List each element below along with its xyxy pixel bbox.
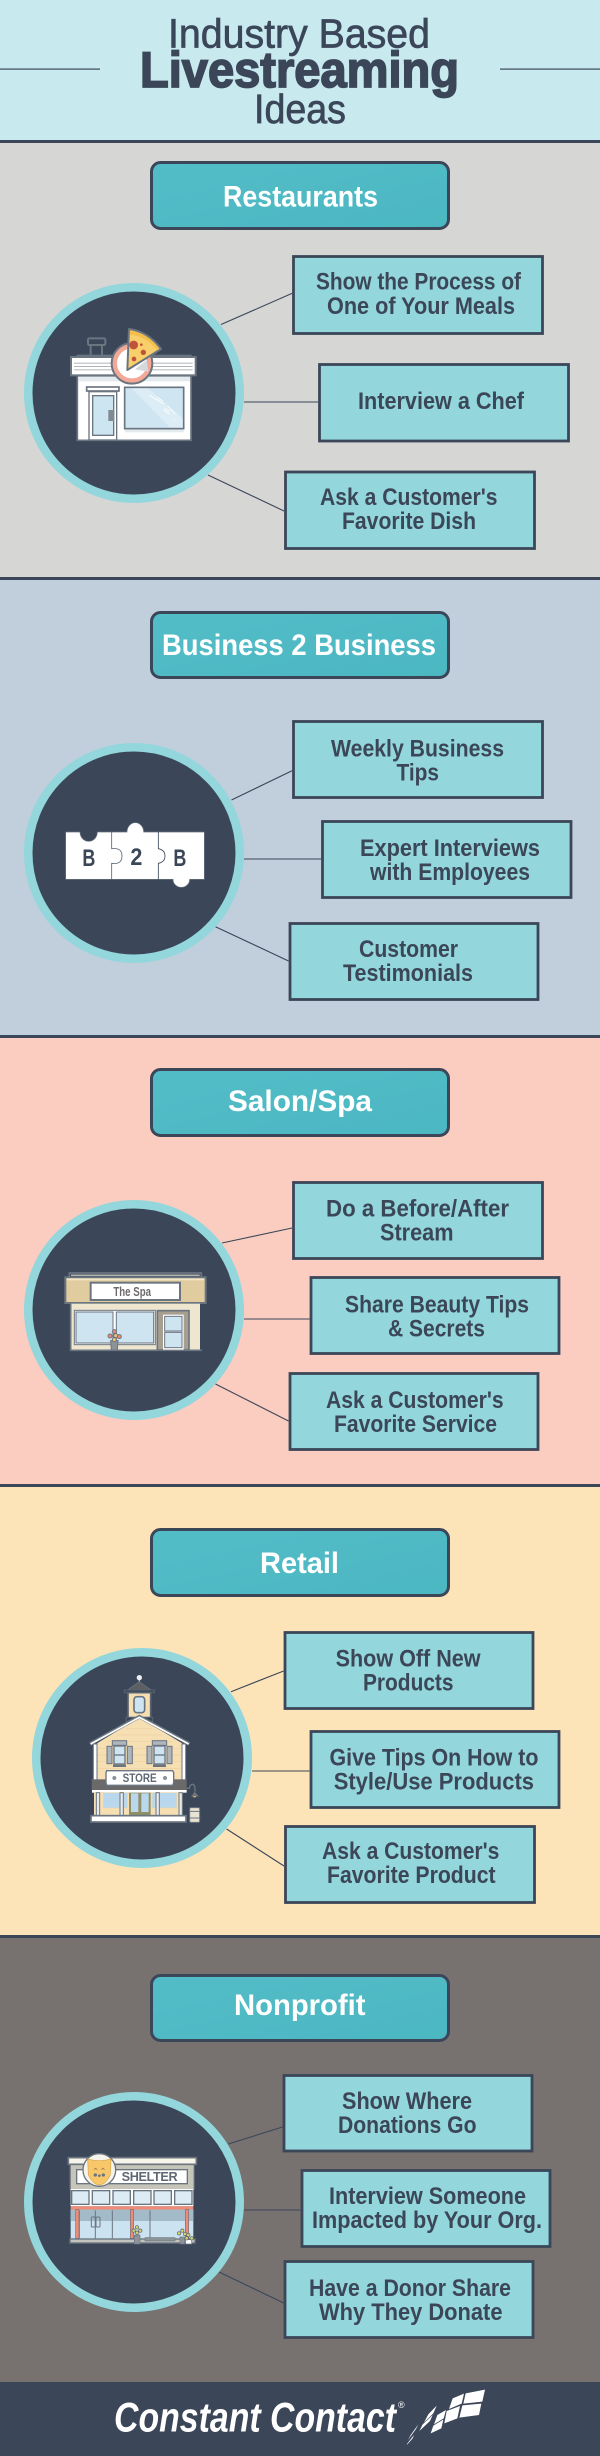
- connector lines: [216, 771, 321, 961]
- icon: restaurant in circle: [28, 287, 240, 499]
- idea box: weekly tips: Weekly Business: [331, 736, 504, 763]
- idea box: style tips: [311, 1732, 559, 1808]
- heading: retail: Retail: [260, 1547, 339, 1580]
- idea box: before after: [294, 1182, 542, 1258]
- idea box: favorite service: Favorite Service: [334, 1411, 497, 1438]
- idea box: expert interviews: Expert Interviews: [360, 835, 540, 862]
- idea box: favorite product: Favorite Product: [327, 1862, 496, 1889]
- idea box: beauty tips: & Secrets: [388, 1316, 485, 1343]
- idea box: interview someone: Interview Someone: [329, 2183, 526, 2210]
- idea box: new products: Products: [363, 1670, 454, 1697]
- idea box: expert interviews: with Employees: [369, 859, 530, 886]
- idea box: before after: Do a Before/After: [326, 1196, 509, 1223]
- heading: restaurants: Restaurants: [223, 180, 378, 214]
- icon: store building in circle: [36, 1652, 248, 1864]
- icon: b2b puzzle in circle: 2: [130, 844, 142, 871]
- idea box: beauty tips: [311, 1278, 559, 1354]
- idea box: favorite dish: [286, 472, 534, 548]
- idea box: before after: Stream: [380, 1220, 454, 1247]
- heading: salon spa: [152, 1070, 448, 1136]
- idea box: beauty tips: Share Beauty Tips: [345, 1292, 529, 1319]
- icon: b2b puzzle in circle: [28, 747, 240, 959]
- idea box: new products: Show Off New: [336, 1646, 481, 1673]
- heading: business 2 business: Business 2 Business: [162, 629, 436, 662]
- idea box: testimonials: Testimonials: [343, 960, 473, 987]
- idea box: favorite product: Ask a Customer's: [322, 1838, 499, 1865]
- icon: b2b puzzle in circle: B: [82, 845, 95, 872]
- panel: header: [0, 0, 600, 143]
- heading: retail: [152, 1530, 448, 1596]
- idea box: show the process: Show the Process of: [316, 269, 522, 296]
- idea box: favorite dish: Favorite Dish: [342, 508, 476, 535]
- logo wordmark: Constant Contact: [114, 2394, 398, 2441]
- icon: shelter in circle: [28, 2096, 240, 2308]
- idea box: weekly tips: Tips: [396, 760, 439, 786]
- idea box: where donations go: Show Where: [342, 2088, 472, 2115]
- idea box: show the process: One of Your Meals: [327, 293, 515, 320]
- panel: restaurants: [0, 143, 600, 580]
- icon: spa storefront in circle: The Spa: [113, 1285, 152, 1299]
- idea box: where donations go: [284, 2076, 532, 2151]
- title: Livestreaming: [140, 42, 459, 98]
- panel: salon spa: [0, 1038, 600, 1487]
- idea box: donor share: Why They Donate: [319, 2299, 502, 2326]
- idea box: weekly tips: [294, 722, 542, 798]
- logo wordmark: ®: [398, 2400, 405, 2410]
- title: [140, 10, 459, 132]
- idea box: testimonials: [290, 924, 538, 1000]
- heading: restaurants: [152, 162, 448, 228]
- idea box: donor share: Have a Donor Share: [309, 2275, 511, 2302]
- idea box: favorite service: Ask a Customer's: [326, 1387, 504, 1414]
- idea box: favorite product: [286, 1826, 534, 1902]
- idea box: interview a chef: [320, 364, 568, 441]
- icon: shelter in circle: SHELTER: [122, 2170, 178, 2184]
- title: Ideas: [254, 86, 346, 132]
- connector lines: [216, 1228, 310, 1421]
- connector lines: [227, 1671, 310, 1866]
- title: Industry Based: [168, 10, 430, 56]
- heading: nonprofit: [152, 1976, 448, 2040]
- heading: business 2 business: [152, 612, 448, 678]
- heading: nonprofit: Nonprofit: [234, 1989, 366, 2022]
- panel: retail: [0, 1487, 600, 1938]
- idea box: favorite service: [290, 1374, 538, 1450]
- logo flag: [407, 2390, 485, 2444]
- idea box: testimonials: Customer: [359, 936, 458, 963]
- connector lines: [208, 293, 318, 511]
- panel: nonprofit: [0, 1938, 600, 2382]
- idea box: where donations go: Donations Go: [338, 2112, 476, 2139]
- idea box: style tips: Style/Use Products: [334, 1769, 534, 1796]
- footer: constant contact: [0, 2382, 600, 2456]
- idea box: show the process: [294, 256, 542, 334]
- icon: spa storefront in circle: [28, 1204, 240, 1416]
- idea box: expert interviews: [322, 822, 571, 898]
- icon: b2b puzzle in circle: B: [173, 845, 186, 872]
- idea box: new products: [285, 1632, 533, 1708]
- connector lines: [219, 2127, 300, 2303]
- heading: salon spa: Salon/Spa: [228, 1085, 373, 1118]
- idea box: donor share: [285, 2262, 533, 2338]
- idea box: interview a chef: Interview a Chef: [358, 388, 525, 415]
- idea box: favorite dish: Ask a Customer's: [320, 484, 498, 511]
- panel: business 2 business: [0, 580, 600, 1038]
- icon: store building in circle: STORE: [123, 1771, 157, 1785]
- idea box: style tips: Give Tips On How to: [330, 1745, 538, 1772]
- idea box: interview someone: [302, 2170, 550, 2246]
- idea box: interview someone: Impacted by Your Org.: [312, 2207, 542, 2234]
